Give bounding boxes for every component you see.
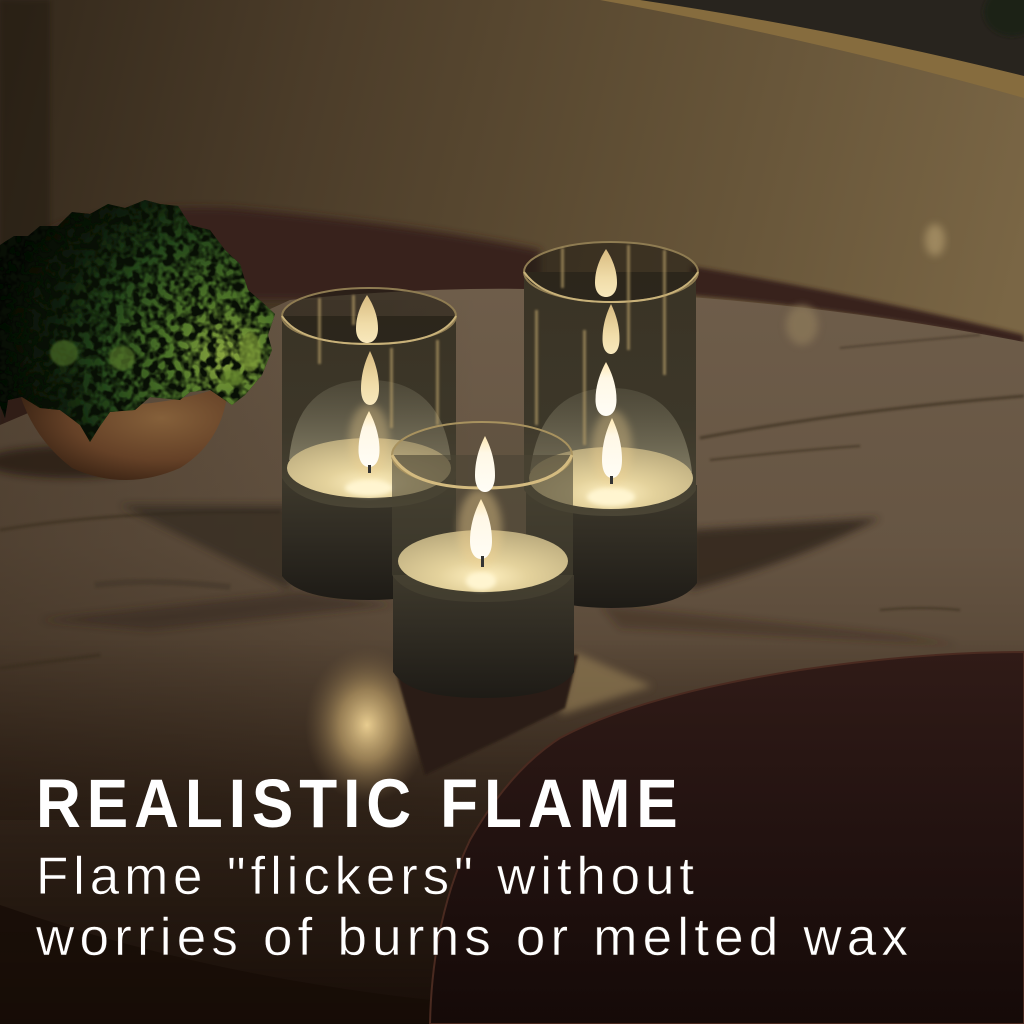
- streaks: [318, 295, 439, 428]
- base: [526, 485, 697, 608]
- wax top: [529, 447, 693, 509]
- candle: front: [392, 422, 574, 698]
- flames: [458, 436, 502, 569]
- rim: [282, 288, 456, 344]
- shadow wedge below front candle: [396, 650, 578, 775]
- base: [282, 478, 456, 600]
- wall corner shadow: [0, 0, 50, 520]
- streaks: [535, 245, 666, 445]
- headline text: [35, 765, 908, 967]
- base: [393, 575, 574, 698]
- inner dome: [530, 388, 692, 472]
- table lower edge: [0, 905, 430, 1024]
- flames: [592, 249, 632, 486]
- pot shadow: [0, 446, 155, 478]
- dark shadow band behind table: [0, 208, 1024, 440]
- flames: [349, 295, 389, 476]
- glass: [392, 455, 573, 602]
- candle: right: [524, 242, 698, 608]
- table highlight: [786, 305, 818, 345]
- chair back: [430, 652, 1024, 1024]
- table left shading: [0, 300, 480, 820]
- subtitle line 2: worries of burns or melted wax: [35, 908, 908, 967]
- wall light spot: [925, 224, 945, 256]
- wax top: [398, 530, 568, 592]
- candle shadows: [40, 505, 960, 645]
- rim: [392, 422, 572, 488]
- wax top: [287, 438, 451, 498]
- rim: [524, 242, 698, 302]
- subtitle line 1: Flame "flickers" without: [36, 847, 694, 906]
- inner dome: [289, 380, 451, 460]
- table marble veins: [0, 335, 1024, 668]
- glass: [282, 316, 456, 508]
- glass: [524, 272, 696, 516]
- background wall: [0, 0, 1024, 520]
- light pools on table: [305, 647, 652, 803]
- highlighted leaves: [50, 332, 261, 386]
- table top: [0, 289, 1024, 1024]
- bottom darkening: [0, 640, 1024, 1024]
- candle: left: [282, 288, 456, 600]
- plant: [0, 200, 275, 480]
- title: REALISTIC FLAME: [36, 765, 678, 842]
- wall mirror frame: [600, 0, 1024, 98]
- pot: [20, 385, 228, 480]
- foliage: [0, 200, 275, 442]
